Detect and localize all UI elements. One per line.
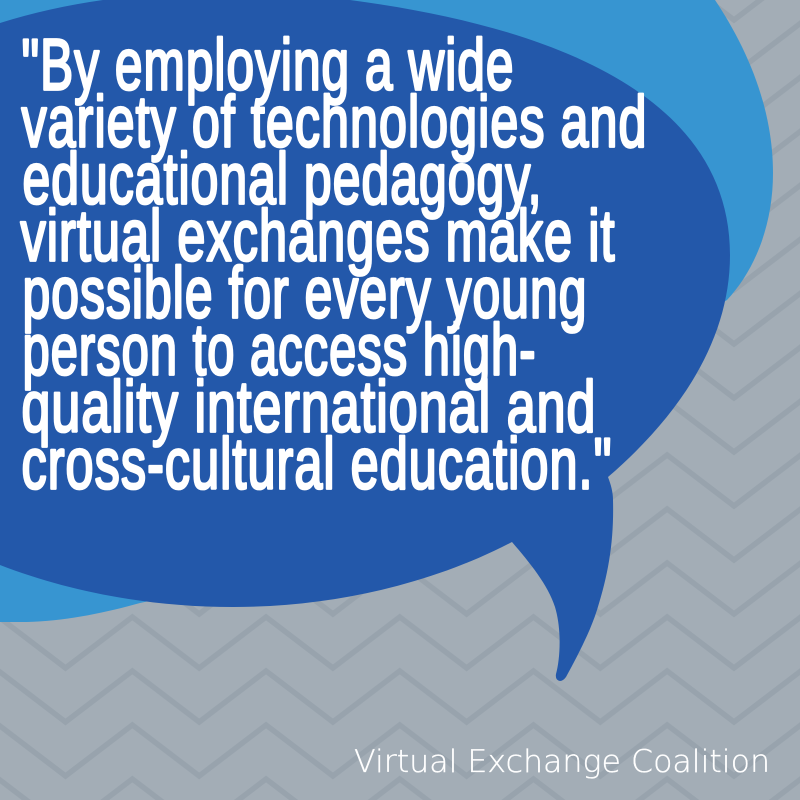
- light blue speech bubble: [0, 0, 773, 622]
- quote text: educational pedagogy,: [22, 140, 542, 220]
- quote text: person to access high-: [22, 310, 536, 390]
- quote text: quality international and: [22, 368, 596, 448]
- quote text: "By employing a wide: [22, 26, 514, 106]
- quote text: [20, 26, 648, 504]
- attribution: Virtual Exchange Coalition: Virtual Exchange Coalition: [354, 744, 770, 780]
- dark blue speech bubble with tail: [0, 0, 730, 681]
